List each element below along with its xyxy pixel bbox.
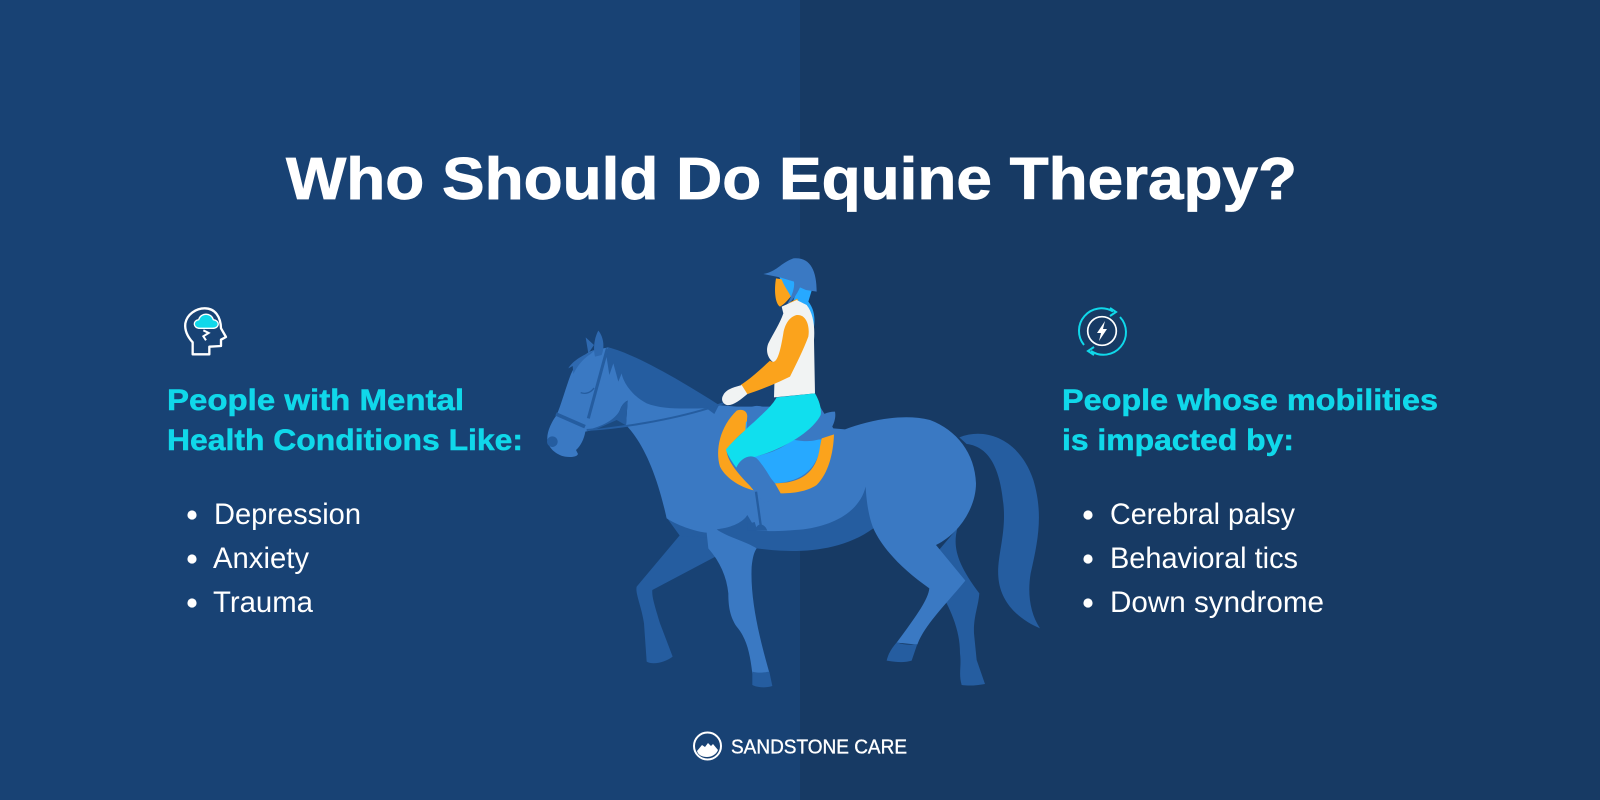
wordmark: SANDSTONE CARE bbox=[731, 736, 907, 758]
list: mental health conditions: Depression bbox=[214, 498, 361, 531]
rider face bbox=[775, 278, 791, 307]
horse belly shadow bbox=[666, 483, 873, 551]
rider breeches bbox=[726, 393, 821, 468]
icon: circular arrows with lightning bolt bbox=[1079, 308, 1126, 355]
horse far legs bbox=[636, 528, 985, 686]
list: mobility conditions: Behavioral tics bbox=[1110, 542, 1298, 575]
horse tail bbox=[959, 434, 1040, 628]
saddle pad bbox=[718, 410, 834, 493]
icon: mountain in circle bbox=[694, 732, 721, 760]
rider helmet bbox=[763, 258, 817, 305]
illustration: rider on horse bbox=[547, 258, 1040, 687]
horse mane bbox=[606, 347, 719, 414]
saddle seat bbox=[747, 406, 835, 441]
heading: mental health: People with Mental bbox=[167, 384, 464, 417]
heading: mobility bbox=[1062, 384, 1438, 457]
rider boot and stirrup bbox=[736, 456, 781, 531]
icon: head with storm cloud bbox=[185, 308, 226, 354]
horse hooves bbox=[752, 642, 917, 687]
list: mental health conditions: Anxiety bbox=[213, 542, 309, 575]
panel: mobility conditions bbox=[1062, 308, 1438, 619]
horse body bbox=[547, 347, 976, 673]
heading: mobility: is impacted by: bbox=[1062, 424, 1294, 457]
list: mental health conditions: Trauma bbox=[213, 586, 313, 619]
horse jaw shadow bbox=[587, 401, 628, 430]
rider hair bbox=[779, 277, 814, 327]
title: Who Should Do Equine Therapy? bbox=[286, 146, 1297, 212]
list: mobility conditions bbox=[1083, 498, 1324, 619]
list: mobility conditions: Cerebral palsy bbox=[1110, 498, 1295, 531]
horse bridle and reins bbox=[547, 348, 723, 447]
list: mental health conditions bbox=[187, 498, 361, 619]
list: mobility conditions: Down syndrome bbox=[1110, 586, 1324, 619]
rider arm bbox=[741, 315, 809, 394]
rider glove bbox=[722, 385, 747, 405]
horse forelock and ears bbox=[568, 331, 603, 374]
heading: mobility: People whose mobilities bbox=[1062, 384, 1438, 417]
logo: Sandstone Care bbox=[694, 732, 907, 760]
heading: mental health: Health Conditions Like: bbox=[167, 424, 523, 457]
heading: mental health bbox=[167, 384, 523, 457]
panel: mental health conditions bbox=[167, 308, 523, 619]
rider neck bbox=[783, 299, 799, 308]
rider vest bbox=[767, 300, 815, 397]
